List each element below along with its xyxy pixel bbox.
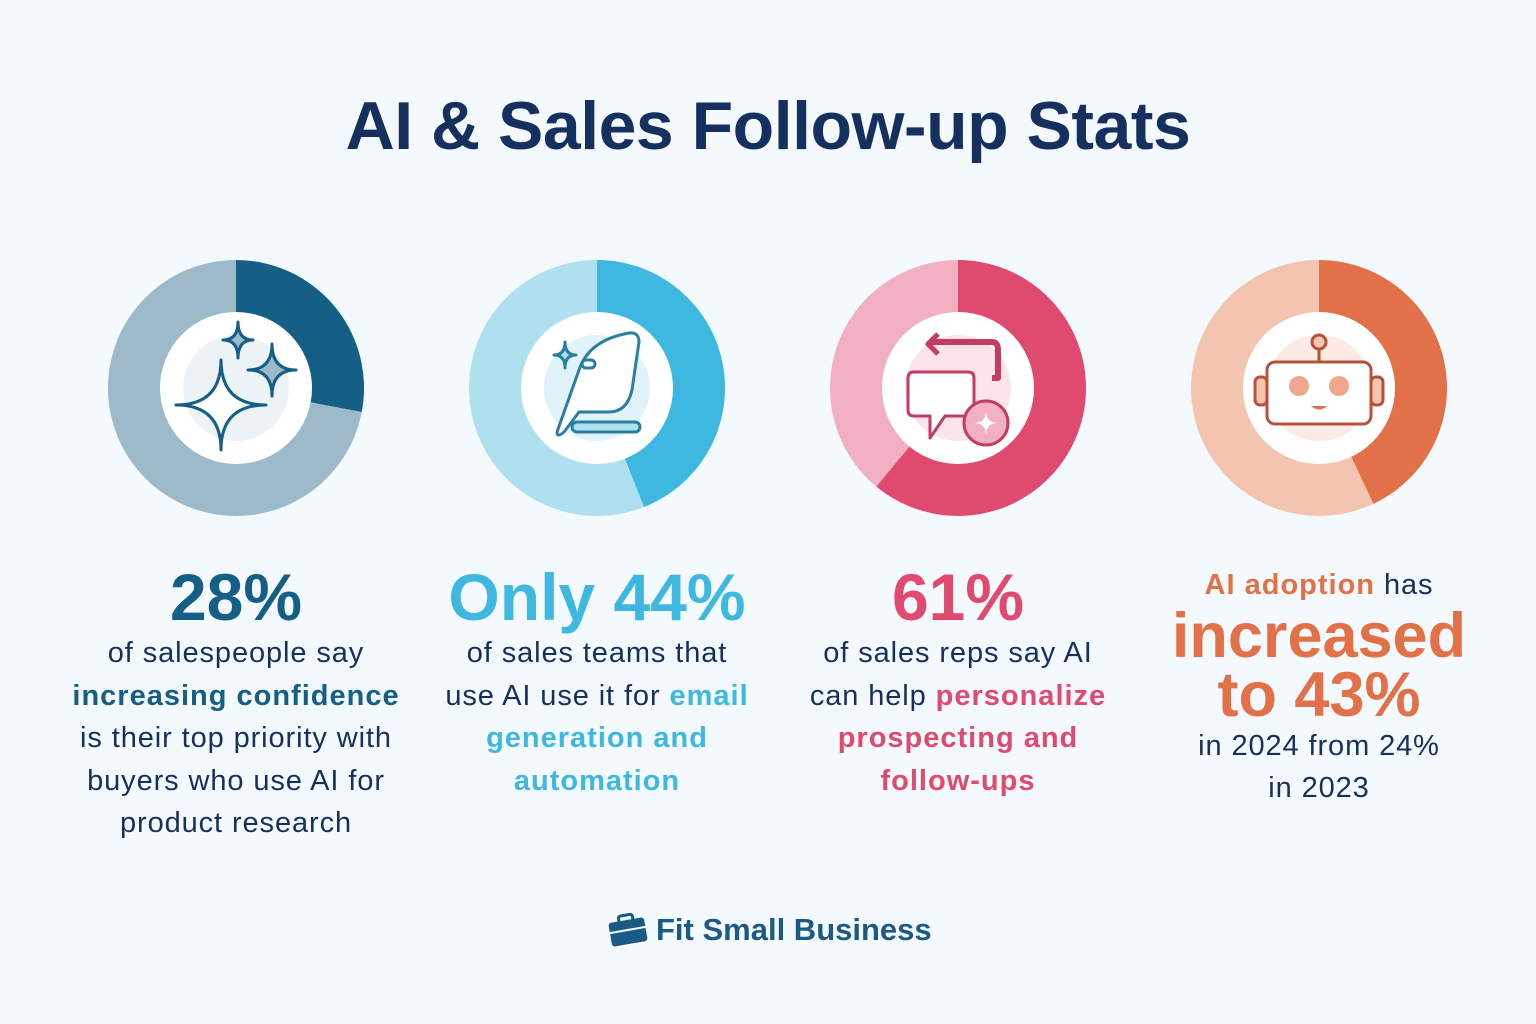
stat 1: increasing confidence — [72, 680, 400, 712]
stat 4 — [1172, 569, 1466, 804]
stat 2: generation and — [486, 722, 708, 754]
stat 1: of salespeople say — [108, 637, 364, 669]
stat 3: prospecting and — [838, 722, 1078, 754]
stat 4: in 2024 from 24% — [1198, 730, 1440, 762]
donut 4: 43% — [1191, 260, 1447, 516]
stat 4: AI adoption has — [1205, 569, 1433, 601]
stat 4: in 2023 — [1268, 772, 1370, 804]
stat 4: increased — [1172, 600, 1466, 670]
icon: briefcase — [608, 912, 648, 946]
icon: quill — [554, 333, 640, 435]
donut 3: 61% — [830, 260, 1086, 516]
stat 3: of sales reps say AI — [823, 637, 1093, 669]
stat 4: to 43% — [1217, 660, 1421, 730]
stat 3: follow-ups — [880, 764, 1035, 796]
icon: chat with arrow — [908, 334, 1008, 445]
stat 1 — [72, 560, 400, 839]
stat 2: Only 44% — [448, 560, 746, 634]
stat 3 — [810, 560, 1106, 796]
stat 2: automation — [514, 764, 680, 796]
stat 2: use AI use it for email — [445, 680, 749, 712]
donut 2: 44% — [469, 260, 725, 516]
stat 1: buyers who use AI for — [87, 764, 385, 796]
stat 1: 28% — [170, 560, 302, 634]
footer logo — [608, 912, 932, 947]
brand name: Fit Small Business — [656, 912, 932, 947]
donut 1: 28% — [108, 260, 364, 516]
title: AI & Sales Follow-up Stats — [346, 88, 1190, 164]
stat 2 — [445, 560, 749, 796]
stat 1: is their top priority with — [80, 722, 392, 754]
icon: robot — [1255, 335, 1383, 424]
stat 3: can help personalize — [810, 680, 1106, 712]
icon: sparkles — [176, 322, 296, 450]
stat 1: product research — [120, 807, 352, 839]
stat 2: of sales teams that — [467, 637, 727, 669]
stat 3: 61% — [892, 560, 1024, 634]
